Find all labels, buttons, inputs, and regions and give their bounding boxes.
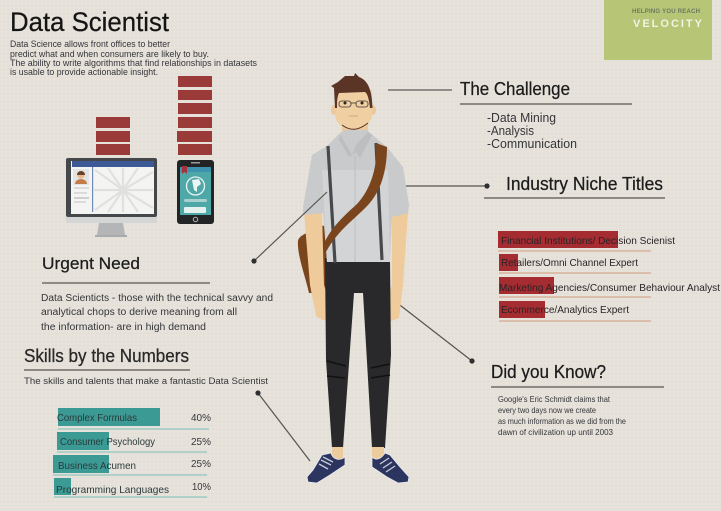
neck xyxy=(342,122,368,146)
intro text: Data Science allows front offices to better xyxy=(10,39,170,50)
body text: Google's Eric Schmidt claims that xyxy=(498,394,611,404)
body text: dawn of civilization up until 2003 xyxy=(498,427,613,437)
bar: marketing agencies xyxy=(499,277,720,297)
bar: business acumen: 25% xyxy=(191,458,211,470)
character: data scientist xyxy=(298,73,409,483)
title: Data Scientist xyxy=(10,7,169,37)
leader line: did you know xyxy=(396,302,475,364)
bar: complex formulas: Complex Formulas xyxy=(57,412,137,424)
brick stack: desktop xyxy=(96,117,130,155)
left shoe xyxy=(307,453,345,483)
trousers xyxy=(325,258,391,448)
intro text: The ability to write algorithms that find relationships in datasets xyxy=(10,58,257,69)
bar: programming languages xyxy=(54,478,211,497)
icon: smartphone xyxy=(177,160,214,224)
bar: ecommerce: Ecommerce/Analytics Expert xyxy=(501,304,629,316)
leader line: industry niche titles xyxy=(401,183,490,189)
heading: Urgent Need xyxy=(42,254,140,273)
bar: consumer psychology: 25% xyxy=(191,436,211,448)
body text: Data Scienticts - those with the technical savvy and xyxy=(41,293,273,304)
logo: velocity: VELOCITY xyxy=(633,18,703,30)
bag xyxy=(298,225,327,293)
body text: analytical chops to derive meaning from all xyxy=(41,307,237,318)
shirt xyxy=(303,130,409,262)
heading: Skills by the Numbers xyxy=(24,346,189,366)
brick stack: mobile xyxy=(177,76,212,155)
logo: velocity xyxy=(604,0,712,60)
bar: financial institutions: Financial Institutions/ Decision Scienist xyxy=(501,235,675,247)
logo: velocity: HELPING YOU REACH xyxy=(632,9,700,15)
list: -Communication xyxy=(487,137,577,151)
section: skills by the numbers xyxy=(24,346,269,497)
suspenders xyxy=(328,143,382,263)
left ankle xyxy=(332,447,343,461)
shoe laces xyxy=(319,457,395,472)
bar: financial institutions xyxy=(498,231,675,251)
section: did you know xyxy=(491,362,664,437)
intro text: predict what and when consumers are likely to buy. xyxy=(10,49,209,60)
trouser creases xyxy=(327,361,390,378)
satchel strap xyxy=(323,143,387,256)
right arm xyxy=(384,212,408,321)
hair xyxy=(331,73,372,108)
mouth xyxy=(349,115,358,117)
heading: Industry Niche Titles xyxy=(506,174,663,194)
body text: the information- are in high demand xyxy=(41,322,206,333)
body text xyxy=(41,293,273,333)
bar: retailers xyxy=(499,254,651,273)
face xyxy=(335,90,372,130)
bar: consumer psychology xyxy=(57,432,211,452)
leader line: skills xyxy=(255,390,310,461)
left arm xyxy=(304,212,331,320)
list: -Data Mining xyxy=(487,111,556,125)
section: urgent need xyxy=(41,254,273,333)
bar: complex formulas: 40% xyxy=(191,412,211,424)
chin shadow xyxy=(342,123,368,129)
section: the challenge xyxy=(460,79,632,151)
bar: business acumen: Business Acumen xyxy=(58,460,136,472)
bar: consumer psychology: Consumer Psychology xyxy=(60,436,156,448)
bar: ecommerce xyxy=(499,301,651,321)
right shoe xyxy=(372,453,409,483)
glasses xyxy=(339,101,368,107)
bar: programming languages: 10% xyxy=(192,481,211,493)
heading: The Challenge xyxy=(460,79,570,99)
bar: programming languages: Programming Languages xyxy=(56,484,169,496)
subheading: The skills and talents that make a fantastic Data Scientist xyxy=(24,376,269,386)
list xyxy=(487,111,577,151)
bar: complex formulas xyxy=(57,408,211,429)
icon: desktop monitor xyxy=(66,158,157,237)
body text: as much information as we did from the xyxy=(498,416,626,426)
intro text: is usable to provide actionable insight. xyxy=(10,67,158,78)
right ankle xyxy=(372,447,384,461)
body text xyxy=(498,394,626,437)
intro text xyxy=(10,39,257,78)
list: -Analysis xyxy=(487,124,534,138)
leader line: the challenge xyxy=(388,89,452,91)
ears xyxy=(331,105,337,115)
leader line: urgent need xyxy=(251,192,327,264)
section: industry niche titles xyxy=(484,174,720,321)
body text: every two days now we create xyxy=(498,405,596,415)
bar: retailers: Retailers/Omni Channel Expert xyxy=(501,257,638,269)
heading: Did you Know? xyxy=(491,362,606,382)
bar: business acumen xyxy=(53,455,211,475)
